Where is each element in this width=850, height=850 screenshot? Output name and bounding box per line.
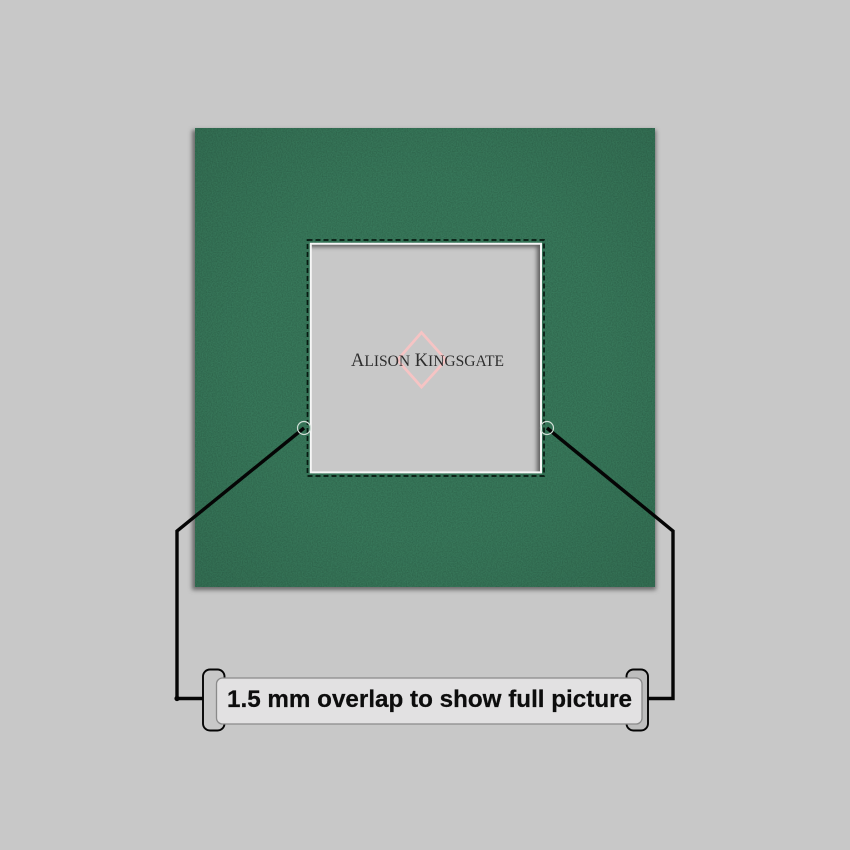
- right bracket of label: [626, 670, 648, 730]
- left line end dot: [174, 696, 180, 701]
- infographic canvas: [174, 127, 675, 732]
- callout label: [216, 678, 642, 724]
- icon: pink diamond: [398, 332, 446, 387]
- arrow: left leader line: [177, 428, 304, 698]
- arrow: right leader line: [547, 428, 673, 698]
- left bracket of label: [203, 670, 224, 730]
- callout text: 1.5 mm overlap to show full picture: [227, 686, 632, 713]
- marker: left circle: [298, 422, 310, 434]
- panel: green mount board: [192, 128, 656, 590]
- logo wordmark: ALISON KINGSGATE: [351, 350, 504, 371]
- logo: Alison Kingsgate: [351, 332, 504, 387]
- marker: right circle: [540, 422, 554, 434]
- panel: picture window opening: [310, 242, 542, 474]
- dashed overlap outline: [308, 240, 544, 476]
